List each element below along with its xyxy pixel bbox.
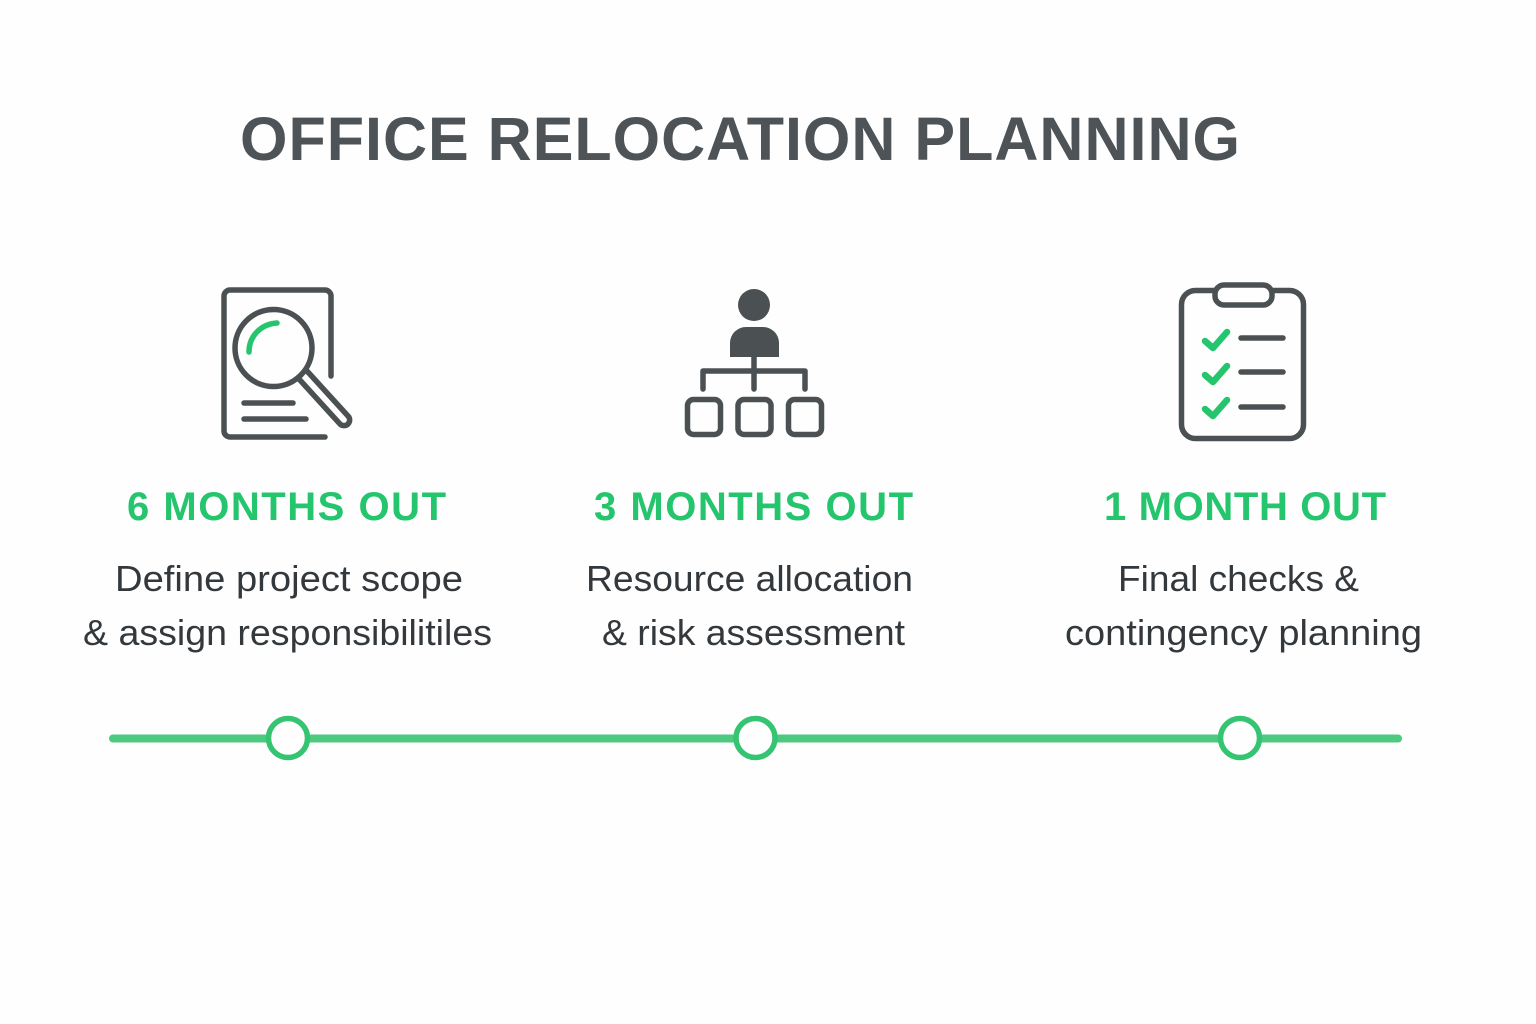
description: 1 month out: contingency planning — [1065, 612, 1422, 653]
title: OFFICE RELOCATION PLANNING — [240, 105, 1240, 173]
description: 6 months out — [83, 558, 492, 653]
description: 6 months out: Define project scope — [115, 558, 463, 599]
description: 3 months out: & risk assessment — [602, 612, 905, 653]
column: 6 months out — [83, 290, 492, 653]
heading: 1 month out: 1 MONTH OUT — [1104, 485, 1386, 529]
icon: clipboard checklist — [1182, 285, 1304, 438]
description: 3 months out — [586, 558, 913, 653]
icon: person with org chart — [688, 289, 822, 434]
icon: document with magnifying glass — [224, 290, 350, 437]
timeline marker: 1 month — [1220, 718, 1260, 758]
column: 3 months out — [586, 289, 913, 653]
column: 1 month out — [1065, 285, 1422, 653]
heading: 3 months out: 3 MONTHS OUT — [594, 485, 913, 529]
timeline — [113, 718, 1398, 758]
description: 6 months out: & assign responsibilitiles — [83, 612, 492, 653]
description: 1 month out — [1065, 558, 1422, 653]
description: 1 month out: Final checks & — [1118, 558, 1359, 599]
heading: 6 months out: 6 MONTHS OUT — [127, 485, 446, 529]
timeline marker: 6 months — [268, 718, 308, 758]
timeline marker: 3 months — [736, 718, 775, 758]
description: 3 months out: Resource allocation — [586, 558, 913, 599]
